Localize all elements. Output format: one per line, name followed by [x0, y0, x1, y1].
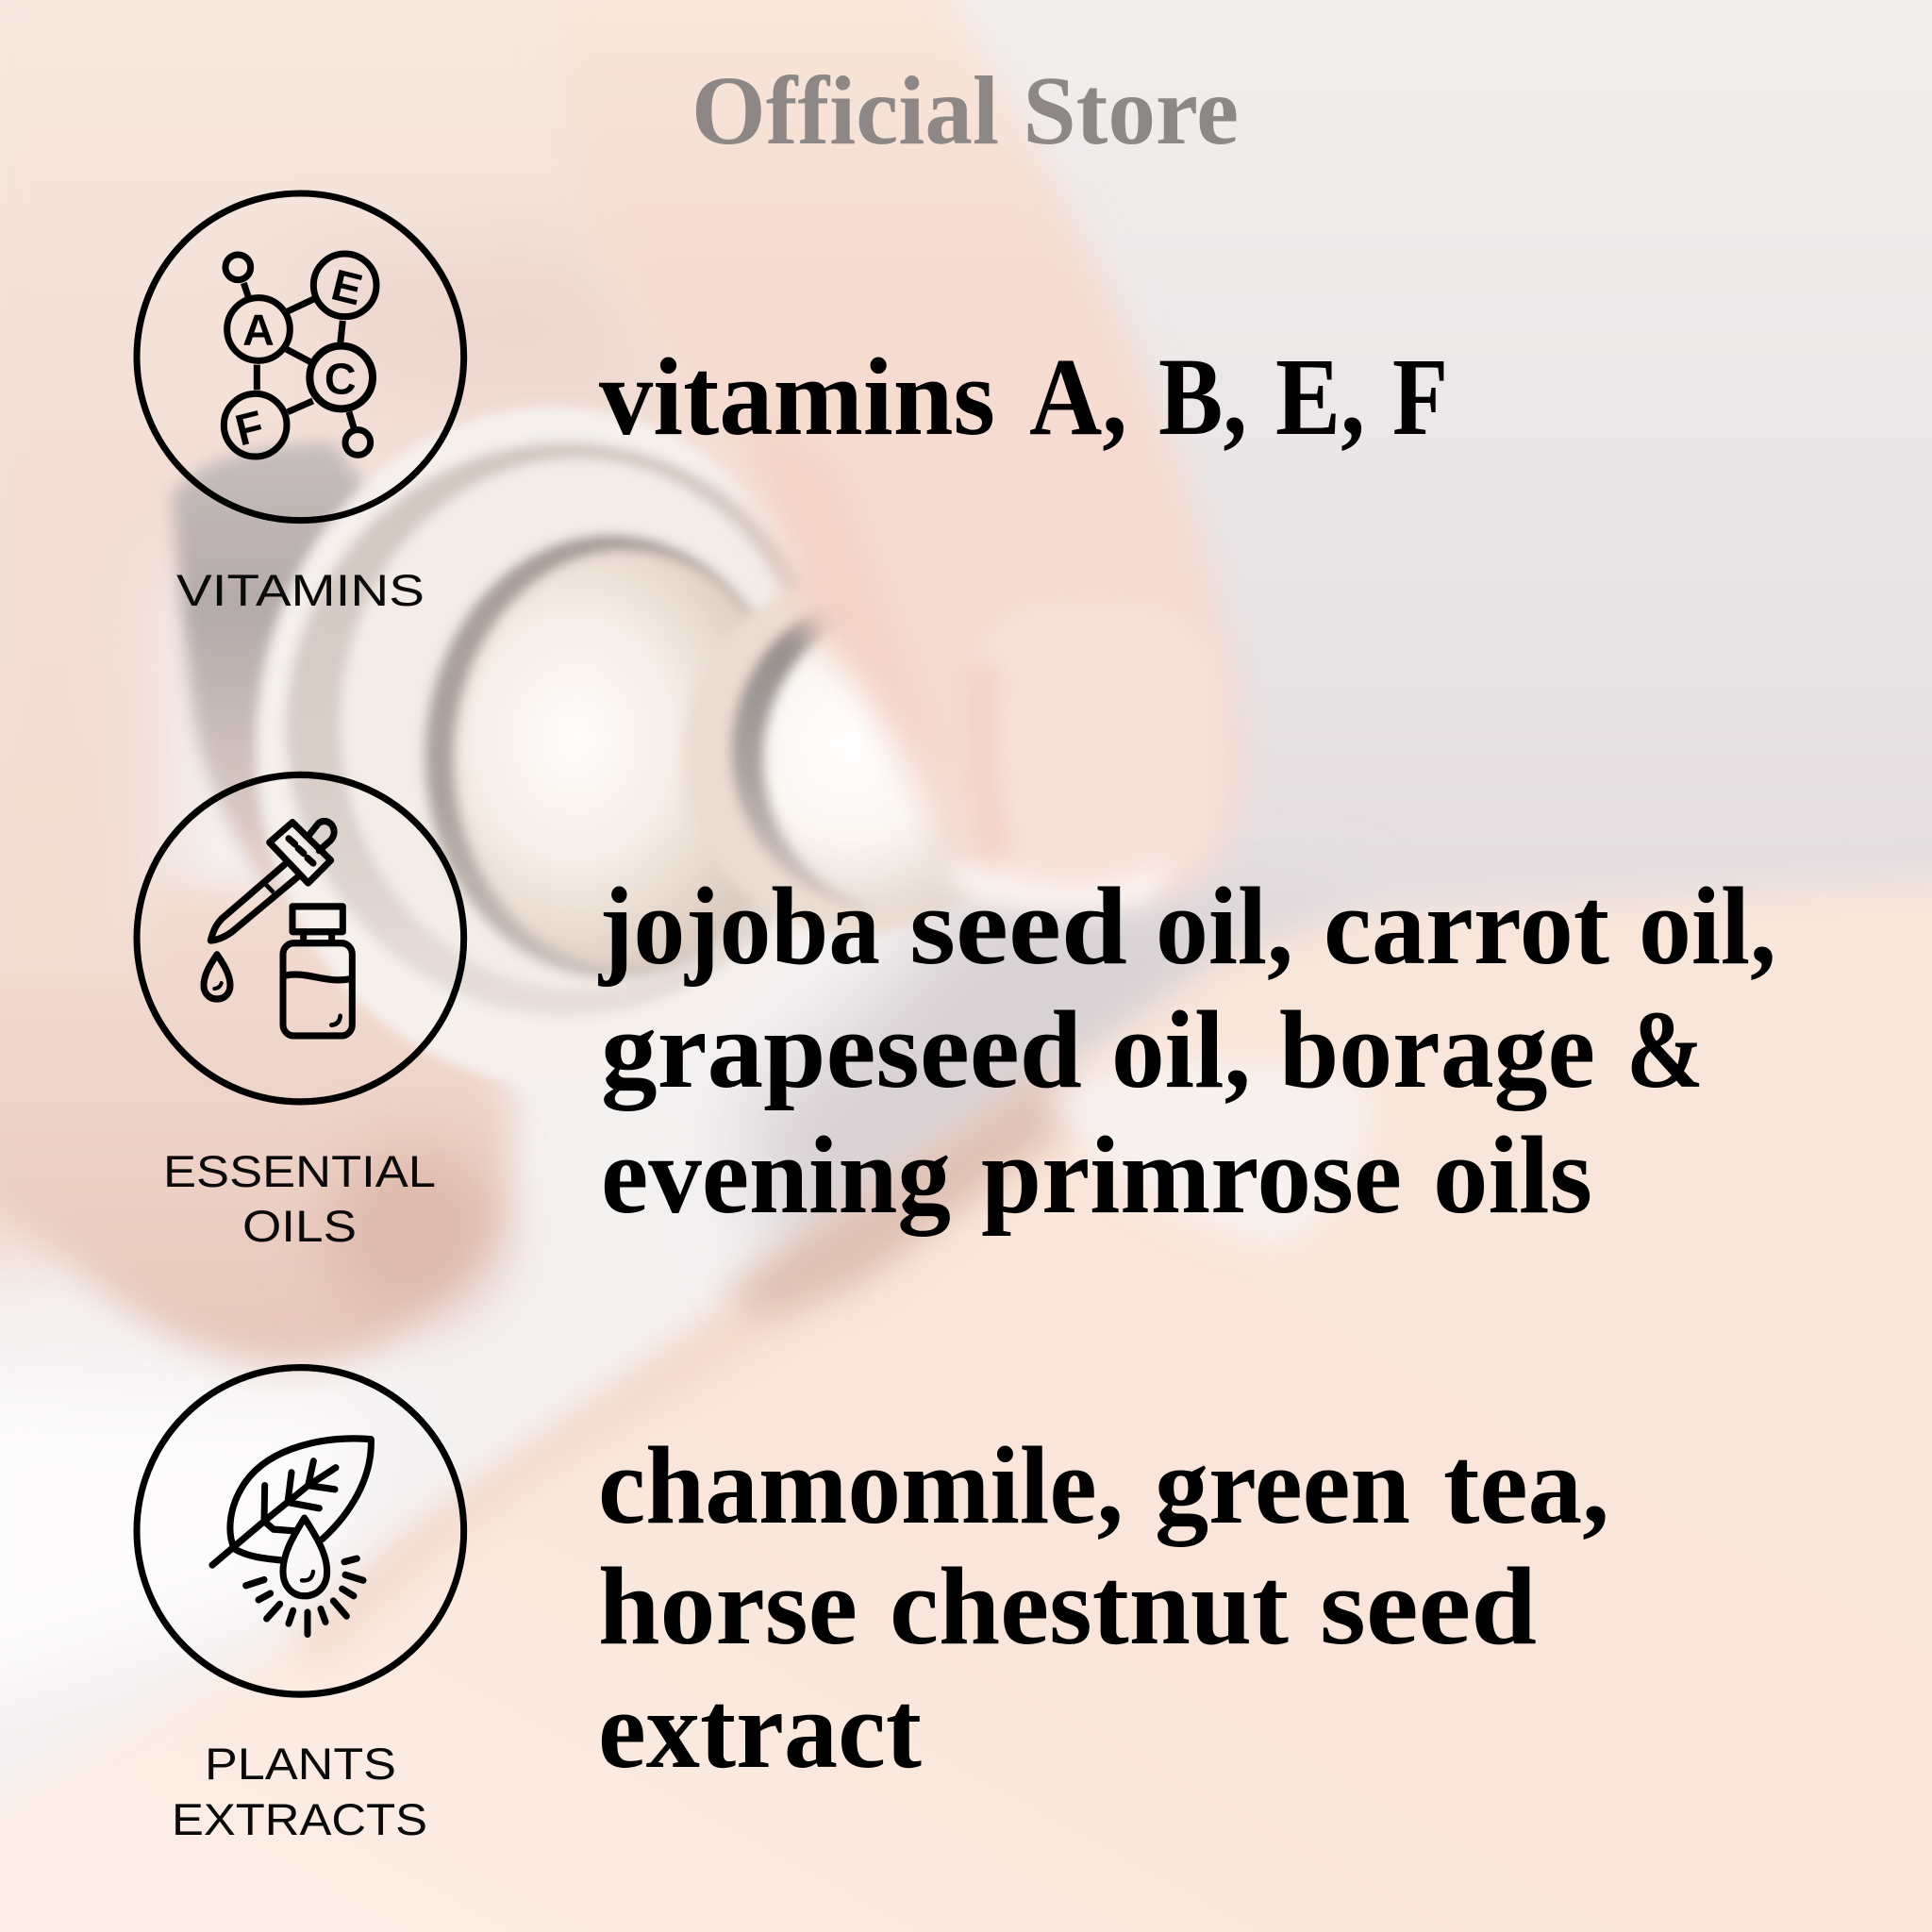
- text block: oils list: evening: [601, 1113, 951, 1237]
- icon: vitamin molecules: F: [230, 401, 269, 455]
- text block: plant extracts list: chamomile,: [598, 1424, 1124, 1547]
- text block: oils list: oil,: [1111, 988, 1251, 1111]
- text block: plant extracts list: tea,: [1443, 1424, 1609, 1547]
- nail: [967, 604, 1220, 893]
- icon: dropper and oil bottle: [137, 774, 464, 1102]
- text block: oils list: primrose: [981, 1113, 1402, 1237]
- text block: vitamins list: B,: [1158, 335, 1247, 458]
- text block: oils list: borage: [1279, 988, 1595, 1111]
- text block: oils list: [598, 864, 1776, 1237]
- label: plants extracts: PLANTS: [205, 1739, 396, 1789]
- label: essential oils: [163, 1146, 436, 1251]
- label: essential oils: OILS: [242, 1201, 357, 1251]
- label: essential oils: ESSENTIAL: [163, 1146, 436, 1196]
- label: plants extracts: [172, 1739, 427, 1844]
- text block: plant extracts list: green: [1155, 1424, 1410, 1547]
- text block: oils list: seed: [909, 864, 1127, 988]
- icon: vitamin molecules: A: [242, 305, 275, 354]
- icon: vitamin molecules: [137, 193, 464, 521]
- label: plants extracts: EXTRACTS: [172, 1794, 427, 1844]
- text block: vitamins list: vitamins: [599, 335, 995, 458]
- icon: vitamin molecules: E: [326, 259, 367, 314]
- text block: oils list: jojoba: [598, 864, 880, 988]
- bottle: [172, 408, 1053, 1084]
- icon: leaf with extract drop: [137, 1368, 464, 1694]
- text block: oils list: carrot: [1324, 864, 1609, 988]
- text block: plant extracts list: chestnut: [890, 1544, 1289, 1668]
- text block: vitamins list: A,: [1029, 335, 1127, 458]
- text block: vitamins list: E,: [1275, 335, 1365, 458]
- lower hand skin: [0, 877, 1932, 1932]
- text block: plant extracts list: horse: [598, 1544, 858, 1668]
- text block: plant extracts list: [598, 1424, 1609, 1791]
- text block: oils list: grapeseed: [601, 988, 1082, 1111]
- text block: vitamins list: F: [1392, 335, 1448, 458]
- icon: vitamin molecules: C: [325, 354, 357, 403]
- text block: oils list: oil,: [1156, 864, 1293, 988]
- title: Official Store: [691, 57, 1239, 165]
- label: vitamins: VITAMINS: [176, 565, 425, 615]
- lotion: [1047, 1063, 1370, 1244]
- text block: oils list: oil,: [1639, 864, 1776, 988]
- panel: plant extracts: [137, 1368, 464, 1844]
- text block: oils list: oils: [1433, 1113, 1592, 1237]
- index finger: [542, 0, 1244, 893]
- text block: oils list: &: [1626, 988, 1704, 1111]
- text block: plant extracts list: extract: [598, 1668, 922, 1791]
- text block: plant extracts list: seed: [1320, 1544, 1537, 1668]
- panel: essential oils: [137, 774, 464, 1251]
- panel: vitamins: [137, 193, 464, 615]
